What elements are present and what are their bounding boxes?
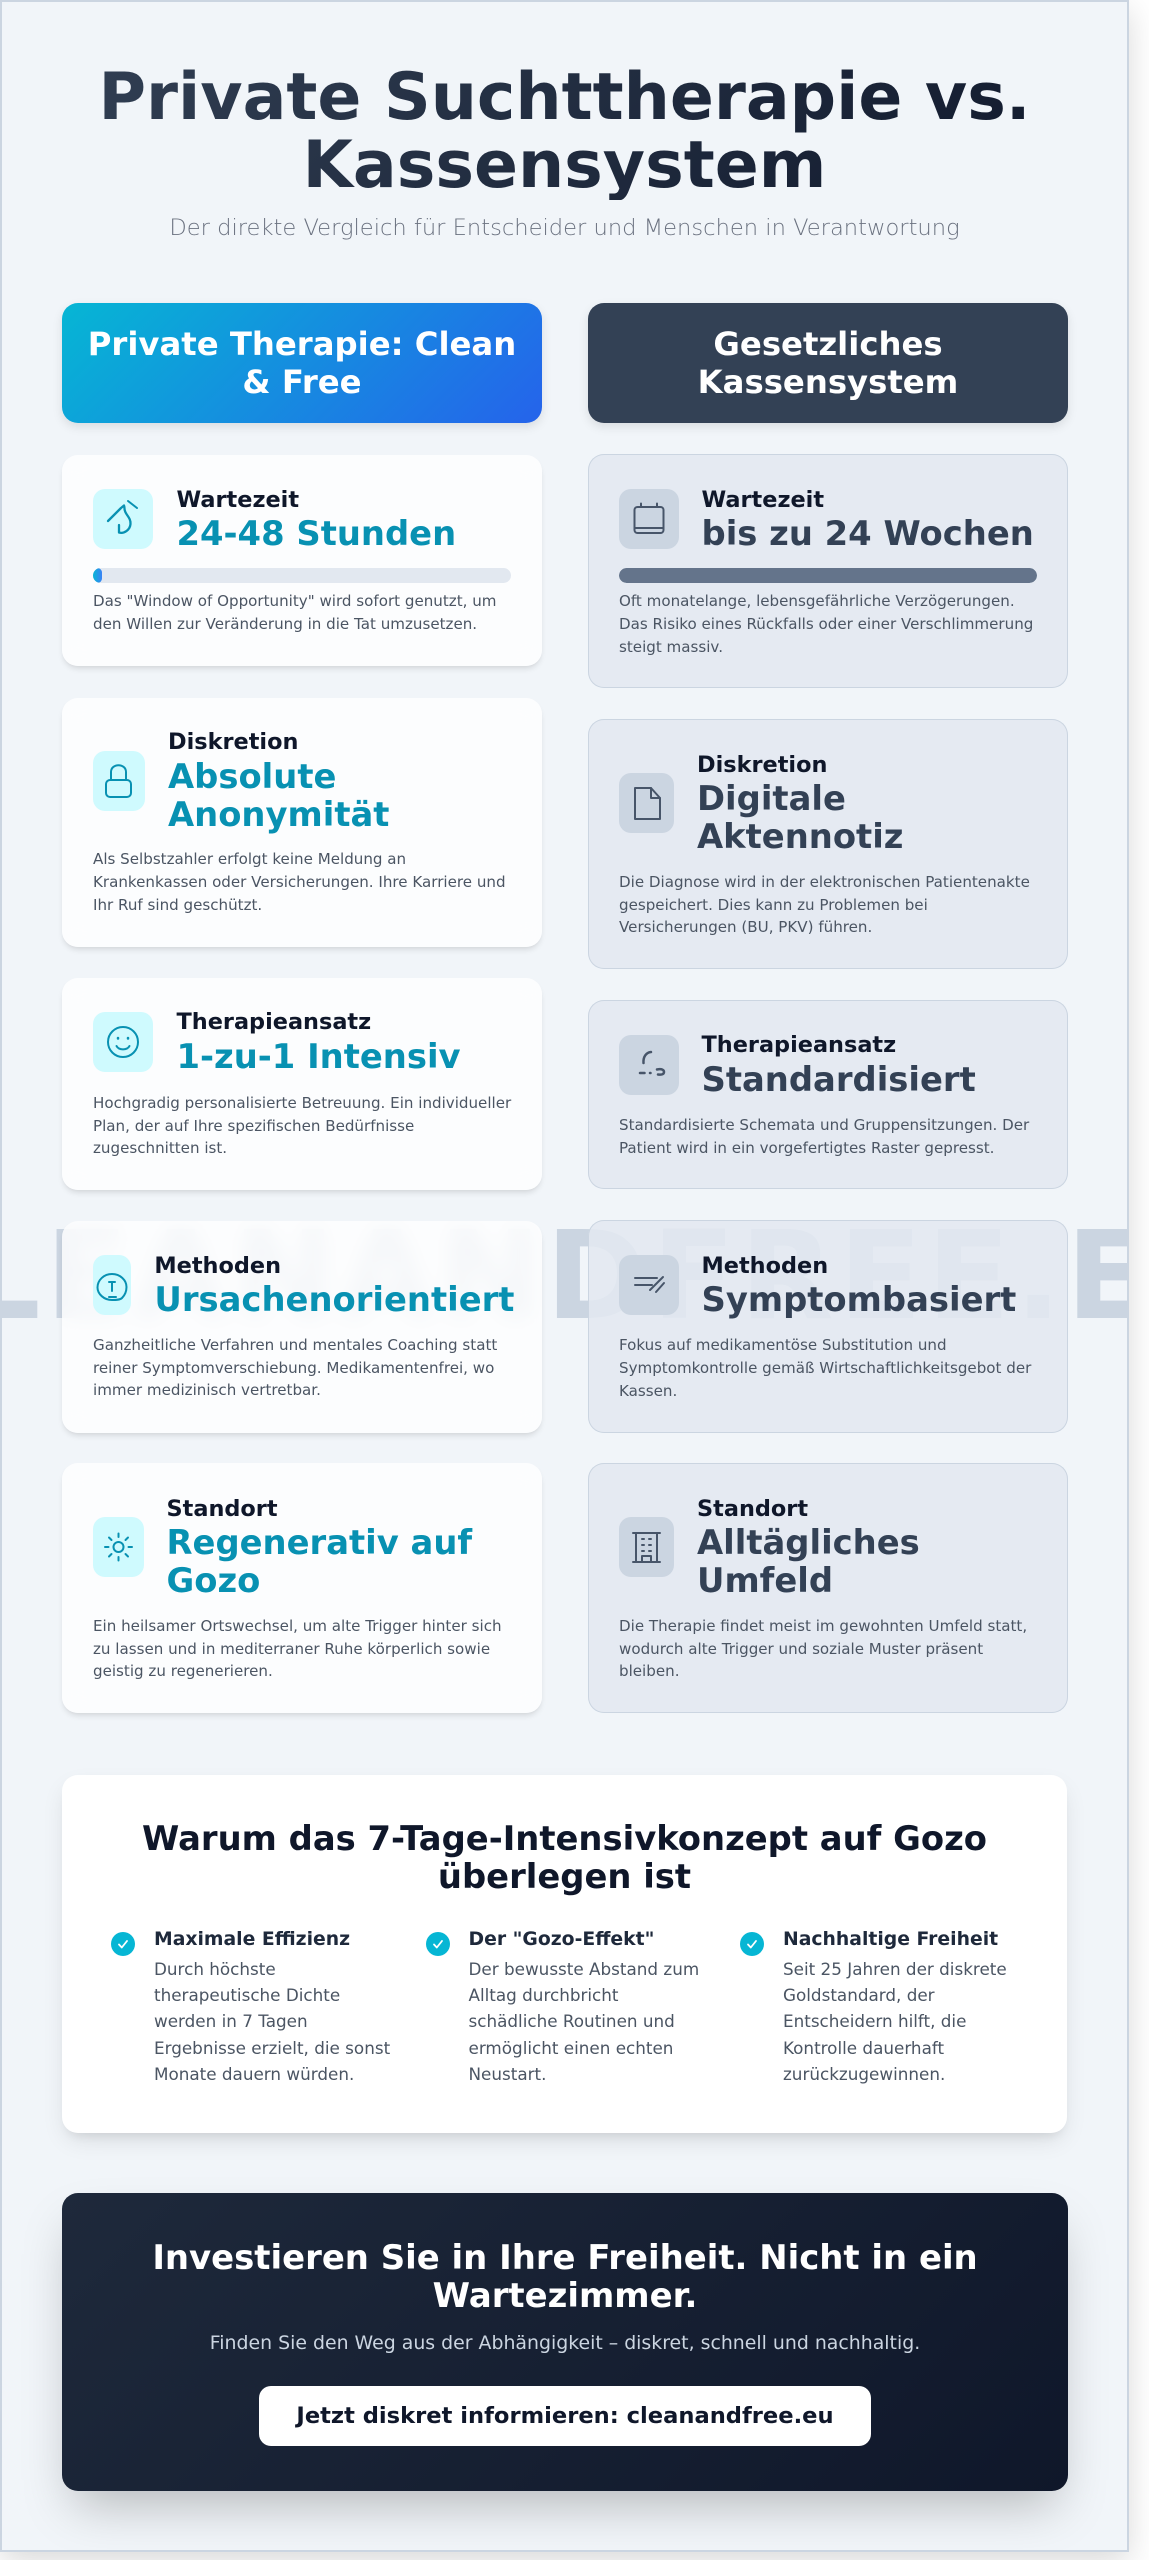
heading bbox=[142, 1819, 987, 1896]
description bbox=[619, 1336, 1032, 1400]
description bbox=[619, 1617, 1027, 1680]
description: Ein heilsamer Ortswechsel, um alte Trigger hinter sich bbox=[93, 1617, 502, 1635]
description: wodurch alte Trigger und soziale Muster präsent bbox=[619, 1640, 983, 1658]
heading: Wartezimmer. bbox=[433, 2276, 697, 2315]
value: Ursachenorientiert bbox=[154, 1280, 514, 1319]
description: Fokus auf medikamentöse Substitution und bbox=[619, 1336, 947, 1354]
check icon 2 bbox=[426, 1932, 450, 1956]
value: Standardisiert bbox=[702, 1060, 976, 1099]
label: Therapieansatz bbox=[702, 1032, 896, 1058]
label: Therapieansatz bbox=[176, 1009, 371, 1035]
icon: document bbox=[619, 773, 674, 833]
description: zugeschnitten ist. bbox=[93, 1139, 227, 1157]
panel: public waiting time bbox=[588, 454, 1068, 688]
description: Das Risiko eines Rückfalls oder einer Verschlimmerung bbox=[619, 615, 1033, 633]
value: Aktennotiz bbox=[697, 817, 903, 856]
description: Die Therapie findet meist im gewohnten Umfeld statt, bbox=[619, 1617, 1027, 1635]
description bbox=[93, 1617, 502, 1680]
value: 24-48 Stunden bbox=[176, 514, 456, 553]
icon: sun bbox=[93, 1517, 144, 1577]
value: Gozo bbox=[166, 1561, 260, 1600]
panel: private discretion bbox=[62, 698, 542, 947]
benefit 1 text: werden in 7 Tagen bbox=[154, 2011, 308, 2031]
column heading: public system: Gesetzliches bbox=[713, 324, 943, 362]
value bbox=[697, 1523, 920, 1600]
description: Versicherungen (BU, PKV) führen. bbox=[619, 918, 872, 936]
panel: private methods bbox=[62, 1221, 542, 1433]
value: bis zu 24 Wochen bbox=[702, 514, 1034, 553]
value: Anonymität bbox=[168, 795, 389, 834]
benefit 3 text bbox=[783, 1958, 1007, 2084]
description: Hochgradig personalisierte Betreuung. Ein individueller bbox=[93, 1094, 511, 1112]
label: Wartezeit bbox=[702, 486, 824, 512]
description: immer medizinisch vertretbar. bbox=[93, 1381, 321, 1399]
description: Patient wird in ein vorgefertigtes Raster gepresst. bbox=[619, 1139, 994, 1157]
heading bbox=[152, 2238, 978, 2315]
value: 1-zu-1 Intensiv bbox=[176, 1037, 461, 1076]
description: Standardisierte Schemata und Gruppensitzungen. Der bbox=[619, 1116, 1029, 1134]
benefit 2 title: Der "Gozo-Effekt" bbox=[468, 1929, 654, 1950]
description: gespeichert. Dies kann zu Problemen bei bbox=[619, 896, 928, 914]
progress bar bbox=[93, 568, 511, 583]
panel: public location bbox=[588, 1463, 1068, 1713]
description: Krankenkassen oder Versicherungen. Ihre Karriere und bbox=[93, 873, 506, 891]
benefit 3 text: Seit 25 Jahren der diskrete bbox=[783, 1958, 1007, 1978]
description: steigt massiv. bbox=[619, 638, 723, 656]
benefit 3 text: Entscheidern hilft, die bbox=[783, 2011, 966, 2031]
panel: why Gozo bbox=[62, 1775, 1067, 2133]
benefit 2 text: schädliche Routinen und bbox=[468, 2011, 675, 2031]
benefit 1 text: Durch höchste bbox=[154, 1958, 276, 1978]
label: Wartezeit bbox=[176, 486, 299, 512]
benefit 3 text: Kontrolle dauerhaft bbox=[783, 2038, 944, 2058]
column heading: public system bbox=[588, 303, 1068, 423]
label: Diskretion bbox=[168, 729, 298, 755]
heading: Investieren Sie in Ihre Freiheit. Nicht in ein bbox=[152, 2238, 978, 2277]
column heading: private therapy bbox=[62, 303, 542, 423]
benefit 2 text: ermöglicht einen echten bbox=[468, 2038, 673, 2058]
label: Standort bbox=[166, 1496, 278, 1522]
benefit 1 text bbox=[154, 1958, 390, 2084]
icon: building bbox=[619, 1517, 674, 1577]
check icon 1 bbox=[111, 1932, 135, 1956]
panel: public discretion bbox=[588, 719, 1068, 969]
check icon 3 bbox=[740, 1932, 764, 1956]
panel: public methods bbox=[588, 1220, 1068, 1433]
benefit 1 text: therapeutische Dichte bbox=[154, 1985, 340, 2005]
heading: überlegen ist bbox=[438, 1856, 691, 1896]
description bbox=[93, 850, 506, 914]
description bbox=[93, 1336, 497, 1399]
label: Standort bbox=[697, 1496, 808, 1522]
column heading: private therapy: Private Therapie: Clean bbox=[88, 324, 516, 362]
value: Symptombasiert bbox=[702, 1280, 1016, 1319]
icon: hand bbox=[93, 489, 153, 549]
benefit 2 text: Neustart. bbox=[468, 2064, 546, 2084]
description: Die Diagnose wird in der elektronischen Patientenakte bbox=[619, 873, 1030, 891]
panel: private therapy approach bbox=[62, 978, 542, 1190]
description bbox=[619, 1116, 1030, 1157]
icon: lock bbox=[93, 751, 145, 811]
description: reiner Symptomverschiebung. Medikamentenfrei, wo bbox=[93, 1359, 494, 1377]
icon: lines and slashes bbox=[619, 1255, 679, 1315]
benefit 2 text: Der bewusste Abstand zum bbox=[468, 1958, 699, 1978]
description bbox=[619, 592, 1033, 656]
progress bar bbox=[619, 568, 1037, 583]
value: Alltägliches bbox=[697, 1523, 920, 1562]
description: zu lassen und in mediterraner Ruhe körperlich sowie bbox=[93, 1640, 490, 1658]
benefit 2 text: Alltag durchbricht bbox=[468, 1985, 618, 2005]
value bbox=[168, 757, 389, 834]
column heading: public system: Kassensystem bbox=[698, 363, 958, 401]
benefit 2 text bbox=[468, 1958, 699, 2084]
benefit 1 text: Monate dauern würden. bbox=[154, 2064, 354, 2084]
button bbox=[259, 2386, 871, 2446]
benefit 3 text: zurückzugewinnen. bbox=[783, 2064, 945, 2084]
description: Ihr Ruf sind geschützt. bbox=[93, 896, 262, 914]
description: Oft monatelange, lebensgefährliche Verzögerungen. bbox=[619, 592, 1015, 610]
title bbox=[0, 64, 1129, 200]
benefit 3 text: Goldstandard, der bbox=[783, 1985, 935, 2005]
description bbox=[619, 873, 1030, 936]
benefit 3 title: Nachhaltige Freiheit bbox=[783, 1929, 998, 1950]
label: Methoden bbox=[702, 1253, 828, 1279]
value bbox=[166, 1523, 472, 1600]
value: Umfeld bbox=[697, 1561, 833, 1600]
description: geistig zu regenerieren. bbox=[93, 1662, 273, 1680]
value: Regenerativ auf bbox=[166, 1523, 472, 1562]
panel: private location bbox=[62, 1463, 542, 1713]
description: den Willen zur Veränderung in die Tat umzusetzen. bbox=[93, 615, 477, 633]
icon: broken arcs bbox=[619, 1035, 679, 1095]
description bbox=[93, 1094, 512, 1157]
value: Digitale bbox=[697, 779, 846, 818]
label: Diskretion bbox=[697, 752, 827, 778]
panel: private waiting time bbox=[62, 455, 542, 666]
icon: calendar bbox=[619, 489, 679, 549]
description bbox=[93, 592, 496, 633]
benefit 1 text: Ergebnisse erzielt, die sonst bbox=[154, 2038, 390, 2058]
title: Kassensystem bbox=[303, 128, 826, 203]
panel: public therapy approach bbox=[588, 1000, 1068, 1189]
label: Methoden bbox=[154, 1253, 281, 1279]
subtitle: Der direkte Vergleich für Entscheider und Menschen in Verantwortung bbox=[169, 215, 960, 241]
subheading: Finden Sie den Weg aus der Abhängigkeit – diskret, schnell und nachhaltig. bbox=[210, 2332, 920, 2354]
title: Private Suchttherapie vs. bbox=[98, 60, 1030, 134]
value bbox=[697, 779, 903, 856]
description: Plan, der auf Ihre spezifischen Bedürfnisse bbox=[93, 1117, 414, 1135]
icon: smile bbox=[93, 1012, 153, 1072]
benefit 1 title: Maximale Effizienz bbox=[154, 1929, 350, 1950]
column heading: private therapy: & Free bbox=[242, 363, 362, 401]
button: Jetzt diskret informieren: cleanandfree.eu bbox=[296, 2403, 834, 2429]
panel: call to action bbox=[62, 2193, 1068, 2491]
description: Kassen. bbox=[619, 1382, 677, 1400]
icon: speech bubble bbox=[93, 1255, 131, 1315]
description: Als Selbstzahler erfolgt keine Meldung an bbox=[93, 850, 406, 868]
description: Symptomkontrolle gemäß Wirtschaftlichkeitsgebot der bbox=[619, 1359, 1031, 1377]
value: Absolute bbox=[168, 757, 336, 796]
description: bleiben. bbox=[619, 1662, 680, 1680]
description: Das "Window of Opportunity" wird sofort genutzt, um bbox=[93, 592, 496, 610]
heading: Warum das 7-Tage-Intensivkonzept auf Gozo bbox=[142, 1819, 987, 1858]
description: Ganzheitliche Verfahren und mentales Coaching statt bbox=[93, 1336, 497, 1354]
